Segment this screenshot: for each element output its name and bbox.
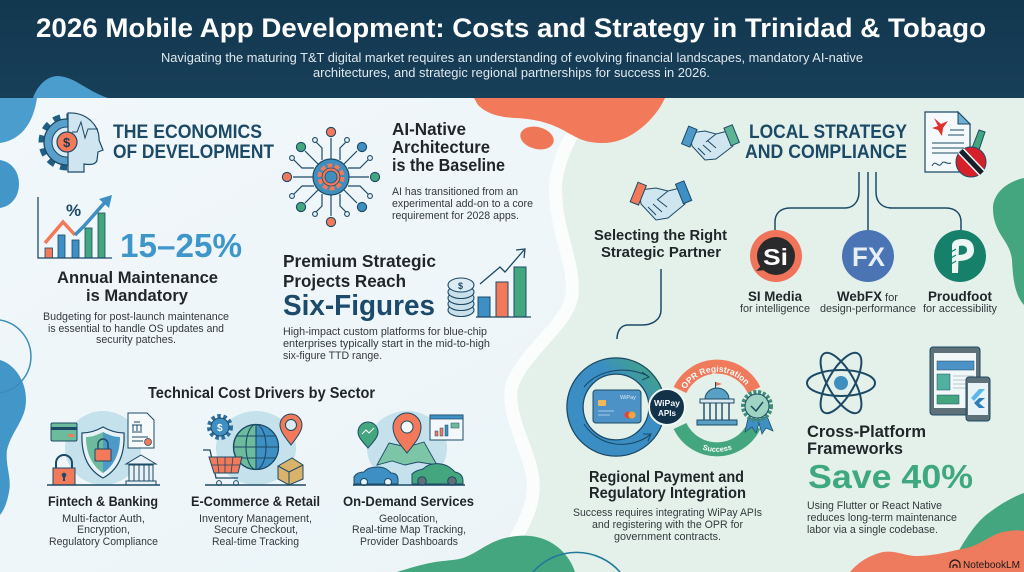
logo: SI Media: Si — [763, 244, 788, 270]
heading: annual maintenance: is Mandatory — [86, 286, 189, 305]
text: premium body — [283, 326, 490, 362]
heading: local strategy and compliance — [745, 122, 907, 163]
heading: AI-native architecture: Architecture — [392, 137, 490, 157]
text: e-commerce and retail: Secure Checkout, — [214, 524, 298, 536]
text: e-commerce and retail — [191, 493, 320, 548]
heading: selecting the right strategic partner — [594, 227, 727, 261]
heading: selecting the right strategic partner: Selecting the Right — [594, 227, 727, 244]
text: WebFX: for — [885, 292, 898, 304]
subtitle — [161, 50, 863, 80]
heading: AI-native architecture: AI-Native — [392, 119, 466, 139]
icon: maintenance growth chart — [38, 195, 112, 258]
text: premium body: enterprises typically start in the mid-to-high — [283, 338, 490, 350]
icon: handshake blue and green — [682, 125, 739, 160]
text: AI-native body — [392, 186, 533, 222]
text: AI-native body: AI has transitioned from an — [392, 186, 518, 198]
heading: AI-native architecture — [392, 119, 505, 175]
logo: Proudfoot — [934, 230, 986, 282]
diagram: WiPay and OPR loop — [566, 357, 774, 457]
subtitle: Navigating the maturing T&T digital market requires an understanding of evolving financial landscapes, mandatory AI-native — [161, 50, 863, 65]
diagram: WiPay and OPR loop: Success — [702, 444, 732, 452]
text: maintenance body: is essential to handle OS updates and — [48, 323, 224, 335]
icon: tablet and phone with Flutter logo — [930, 347, 990, 421]
diagram: WiPay and OPR loop: WiPay — [620, 395, 636, 401]
logo: SI Media — [750, 230, 802, 282]
text: SI Media: SI Media — [748, 289, 802, 304]
text: e-commerce and retail: E-Commerce & Retail — [191, 493, 320, 509]
icon: compliance document with T&T flag — [925, 112, 986, 177]
text: on-demand services: Provider Dashboards — [360, 536, 458, 548]
text: cross-platform body: Using Flutter or React Native — [807, 500, 942, 512]
text: Proudfoot: Proudfoot — [928, 289, 992, 304]
icon: AI circuit gear — [282, 127, 380, 227]
icon: e-commerce and retail — [203, 411, 306, 485]
heading: cross-platform frameworks: Cross-Platform — [807, 422, 926, 441]
text: on-demand services — [343, 493, 474, 548]
text: Proudfoot: for accessibility — [923, 303, 997, 315]
logo: WebFX: FX — [852, 242, 885, 272]
text: fintech and banking: Regulatory Compliance — [49, 536, 158, 548]
heading: local strategy and compliance: AND COMPLIANCE — [745, 142, 907, 163]
heading: regional payment and regulatory integration: Regulatory Integration — [589, 485, 746, 502]
text: Proudfoot — [923, 289, 997, 315]
heading: the economics of development: THE ECONOMICS — [113, 122, 262, 143]
icon: handshake orange and blue — [630, 181, 692, 220]
heading: cross-platform frameworks — [807, 422, 926, 458]
icon: fintech and banking — [47, 411, 160, 485]
heading: premium strategic projects — [283, 251, 436, 291]
heading: technical cost drivers: Technical Cost Drivers by Sector — [148, 385, 375, 402]
diagram: WiPay and OPR loop: OPR Registration — [682, 366, 748, 388]
heading: annual maintenance: Annual Maintenance — [57, 268, 218, 287]
diagram: WiPay and OPR loop: WiPay — [654, 398, 680, 408]
icon: maintenance growth chart: % — [66, 201, 81, 220]
text: maintenance body: security patches. — [96, 334, 176, 346]
subtitle: architectures, and strategic regional partnerships for success in 2026. — [313, 65, 710, 80]
heading: the economics of development — [113, 122, 274, 163]
text: fintech and banking: Multi-factor Auth, — [62, 513, 145, 525]
text: cross-platform body: labor via a single codebase. — [807, 524, 938, 536]
text: premium body: High-impact custom platforms for blue-chip — [283, 326, 487, 338]
text: payment body — [573, 507, 762, 543]
text: payment body: government contracts. — [614, 531, 721, 543]
heading: premium strategic projects: Premium Strategic — [283, 251, 436, 271]
heading: the economics of development: OF DEVELOPMENT — [113, 142, 274, 163]
text: on-demand services: Geolocation, — [379, 513, 438, 525]
heading: regional payment and regulatory integration: Regional Payment and — [589, 469, 744, 486]
heading: selecting the right strategic partner: Strategic Partner — [601, 244, 721, 261]
connector: partners tree — [775, 172, 961, 230]
heading: regional payment and regulatory integration — [589, 469, 746, 502]
text: fintech and banking — [48, 493, 158, 548]
watermark: NotebookLM: NotebookLM — [963, 559, 1020, 571]
stat: six-figures: Six-Figures — [283, 290, 435, 322]
icon: on-demand services — [353, 411, 465, 486]
heading: AI-native architecture: is the Baseline — [392, 155, 505, 175]
header band — [0, 0, 1024, 98]
icon: gear and head with dollar coin — [42, 113, 103, 172]
text: premium body: six-figure TTD range. — [283, 350, 382, 362]
text: maintenance body — [43, 311, 229, 346]
text: on-demand services: On-Demand Services — [343, 493, 474, 509]
logo: WebFX — [842, 230, 894, 282]
heading: cross-platform frameworks: Frameworks — [807, 439, 903, 458]
icon: e-commerce and retail: $ — [217, 423, 223, 434]
text: WebFX — [820, 289, 916, 315]
diagram: WiPay and OPR loop: APIs — [658, 408, 676, 418]
heading: premium strategic projects: Projects Reach — [283, 271, 406, 291]
stat: save 40%: Save 40% — [808, 458, 973, 495]
text: SI Media: for intelligence — [740, 303, 810, 315]
text: e-commerce and retail: Inventory Management, — [199, 513, 312, 525]
background: right panel — [511, 90, 1024, 572]
text: AI-native body: experimental add-on to a core — [392, 198, 533, 210]
text: AI-native body: requirement for 2028 apps. — [392, 210, 519, 222]
text: fintech and banking: Encryption, — [77, 524, 130, 536]
text: cross-platform body: reduces long-term maintenance — [807, 512, 957, 524]
text: on-demand services: Real-time Map Tracking, — [352, 524, 466, 536]
text: SI Media — [740, 289, 810, 315]
connector: partner to payment — [617, 269, 661, 339]
text: payment body: Success requires integrating WiPay APIs — [573, 507, 762, 519]
icon: gear and head with dollar coin: $ — [63, 135, 71, 150]
heading: local strategy and compliance: LOCAL STRATEGY — [749, 122, 907, 143]
stat: 15–25%: 15–25% — [120, 227, 242, 264]
title: 2026 Mobile App Development: Costs and Strategy in Trinidad & Tobago — [36, 13, 986, 43]
text: fintech and banking: Fintech & Banking — [48, 493, 158, 509]
text: e-commerce and retail: Real-time Tracking — [212, 536, 299, 548]
icon: React atom — [807, 347, 875, 419]
heading: annual maintenance — [57, 268, 218, 305]
text: WebFX: WebFX — [837, 289, 882, 304]
text: WebFX: design-performance — [820, 303, 916, 315]
text: maintenance body: Budgeting for post-launch maintenance — [43, 311, 229, 323]
icon: coin stack and bar chart — [448, 249, 531, 317]
icon: coin stack and bar chart: $ — [458, 281, 463, 291]
text: payment body: and registering with the OPR for — [592, 519, 743, 531]
text: cross-platform body — [807, 500, 957, 536]
